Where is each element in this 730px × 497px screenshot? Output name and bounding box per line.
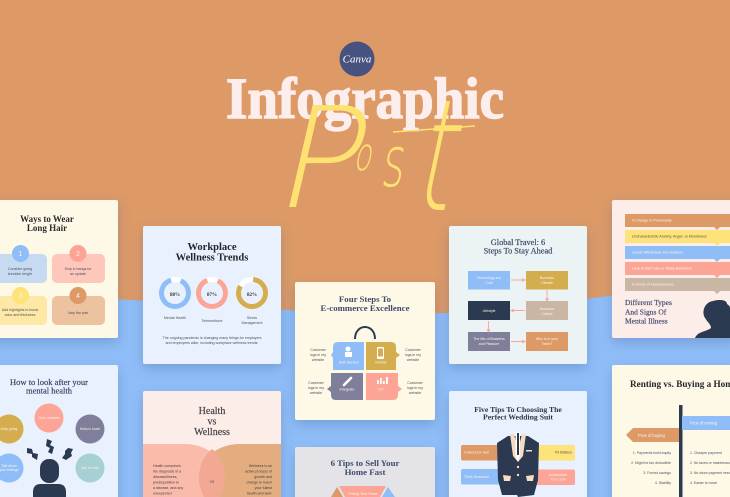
panel: 6 Tips to Sell Your Home Fast (295, 447, 435, 497)
venn shapes: growth and (254, 475, 272, 479)
sign bars: A Change In Personality (632, 218, 672, 222)
flowchart: Technology and (477, 276, 501, 280)
heading: Five Tips To Choosing The (474, 405, 562, 414)
venn shapes: a disease, and any (153, 486, 183, 490)
bag quadrants: logs in my (310, 353, 326, 357)
tip boxes: 3 (19, 293, 23, 300)
heading: Long Hair (27, 223, 67, 233)
tip boxes: 4 (76, 293, 80, 300)
tip circles: your feelings (0, 468, 19, 472)
sign bars (625, 214, 730, 294)
bag quadrants: website (407, 358, 419, 362)
bag quadrants: IoT (378, 388, 384, 392)
donut charts: 82% (247, 293, 257, 298)
heading: Wellness (194, 427, 230, 438)
venn shapes: disease/illness, (153, 475, 177, 479)
heading: How to look after your (10, 377, 88, 387)
hexagon segments: Pricing Your Home (348, 492, 378, 496)
tip boxes: Snip in bangs for (65, 267, 91, 271)
panel: How to look after your mental health (0, 365, 118, 497)
list: buying: 3. Forced savings (643, 471, 671, 475)
venn shapes: unexpected (153, 492, 172, 496)
bag quadrants: Customer (407, 381, 423, 385)
flowchart: Business (540, 307, 554, 311)
panel: Global Travel 6 Steps (449, 226, 587, 364)
heading: Different Types (625, 298, 672, 307)
donut charts: Mental Health (164, 316, 186, 320)
heading: Perfect Wedding Suit (483, 412, 553, 421)
heading: And Signs Of (625, 307, 667, 316)
bag quadrants: logs in my (308, 386, 324, 390)
bag quadrants: website (312, 358, 324, 362)
heading: vs (208, 416, 217, 428)
tip labels (461, 445, 575, 485)
venn shapes (143, 444, 281, 497)
bag quadrants: logs in my (407, 386, 423, 390)
heading: Wellness Trends (176, 252, 248, 264)
bag quadrants: Mobile (375, 360, 387, 364)
sign bars: A Sense of Hopelessness (632, 282, 674, 286)
heading: E-commerce Excellence (321, 303, 410, 313)
heading: Home Fast (345, 467, 385, 477)
list: buying: 1. Payments build equity (633, 451, 671, 455)
logo: Canva (340, 42, 374, 76)
bag quadrants: Integrate (340, 388, 354, 392)
heading: Workplace (188, 242, 236, 253)
bag quadrants (308, 342, 424, 400)
heading: mental health (26, 386, 73, 396)
icon: stressed person (27, 439, 73, 497)
tip labels: Think Seasonal (464, 475, 489, 479)
tip boxes: Consider going (8, 267, 32, 271)
flowchart (468, 271, 568, 351)
sign bars: Social Withdrawal and Isolation (632, 250, 683, 254)
panel: Five Tips To Choosing The Perfect Wedding Suit (449, 391, 587, 497)
donut charts: 87% (207, 293, 217, 298)
tip boxes: an update (70, 272, 86, 276)
title: Post script: t (404, 66, 479, 247)
title: Post script: o (350, 129, 379, 182)
venn shapes: Wellness is an (249, 464, 272, 468)
list: buying: 2. Might be tax deductible (631, 461, 671, 465)
tip circles: Talk about (1, 464, 17, 468)
flowchart: Culture (541, 312, 553, 316)
tip labels: Accessorize (549, 473, 567, 477)
bag quadrants: website (310, 391, 322, 395)
heading: Global Travel: 6 (491, 238, 545, 247)
panel: Health vs Wellness (143, 391, 281, 497)
heading: Health (199, 406, 225, 417)
tip boxes: Add highlights to boost (2, 308, 38, 312)
heading: Steps To Stay Ahead (484, 246, 553, 255)
bag handle (355, 327, 375, 339)
bag quadrants: website (409, 391, 421, 395)
tip boxes: 1 (19, 251, 23, 258)
tip boxes: 2 (76, 251, 80, 258)
flowchart: Team? (542, 342, 552, 346)
tip boxes: shoulder length (8, 272, 32, 276)
panel: Renting vs. Buying a Home (612, 365, 730, 497)
flowchart: Lifestyle (483, 309, 495, 313)
title: Infographic: Infographic (226, 66, 504, 131)
venn shapes: health and well- (247, 492, 273, 496)
heading: 6 Tips to Sell Your (331, 458, 399, 468)
venn shapes: Health comprises (153, 464, 181, 468)
flowchart: Cost (485, 281, 493, 285)
donut charts: Stress (247, 316, 257, 320)
heading: Four Steps To (339, 294, 391, 304)
donut charts: Telemedicine (202, 319, 222, 323)
bag quadrants: Customer (405, 348, 421, 352)
bag quadrants: Customer (308, 381, 324, 385)
panel: Ways to Wear Long Hair (0, 200, 118, 338)
paragraph: The ongoing pandemic is changing many things for employers (163, 336, 261, 340)
center bar (679, 405, 682, 497)
tip circles: Keep in touch (80, 427, 100, 431)
icon: silhouette (695, 300, 730, 338)
bag quadrants: Self Service (339, 360, 359, 364)
sign bars: Lack of Self Care or Risky Behaviors (632, 266, 692, 270)
venn shapes: predisposition to (153, 480, 179, 484)
tip circles: Keep going (1, 427, 18, 431)
list: renting: 4. Easier to move (690, 481, 717, 485)
flag: pros of renting: Pros of renting (690, 420, 718, 426)
paragraph: and employees alike, including workplace wellness trends. (166, 341, 258, 345)
background: blue wave (0, 280, 730, 497)
heading: Ways to Wear (20, 214, 74, 224)
panel: Four Steps To E-commerce Excellence (295, 282, 435, 420)
list: buying: 4. Stability (655, 481, 671, 485)
flowchart: Who is in your (536, 337, 558, 341)
flowchart: Climate (541, 281, 553, 285)
bag quadrants: Customer (310, 348, 326, 352)
tip labels: Colours for Suit (464, 450, 489, 454)
tip boxes: Vary the part (68, 311, 88, 315)
tip labels: Fit Matters (555, 450, 572, 454)
panel: Different Types And Signs Of Mental Illness (612, 200, 730, 338)
list: renting: 1. Cheaper payment (690, 451, 722, 455)
venn shapes: VS (210, 480, 215, 484)
venn shapes: change to reach (246, 480, 272, 484)
donut charts: Management (242, 321, 262, 325)
flag: pros of buying (626, 428, 679, 442)
tip boxes (0, 245, 105, 325)
tip circles (0, 404, 104, 482)
title: Post script (264, 66, 479, 247)
venn shapes: active process of (245, 470, 272, 474)
venn shapes: your fullest (255, 486, 272, 490)
logo: Canva: Canva (343, 54, 372, 66)
title: Post script: P (264, 78, 386, 241)
flag: pros of renting (682, 416, 730, 430)
sign bars: Uncharacteristic Anxiety, Anger, or Moodiness (632, 234, 707, 238)
tip circles: Go to sessions (38, 416, 60, 420)
donut charts (157, 275, 267, 325)
donut charts: 88% (170, 293, 180, 298)
flowchart: The Mix of Business (473, 337, 505, 341)
heading: Mental Illness (625, 317, 668, 326)
panel: Workplace Wellness Trends (143, 226, 281, 364)
tip boxes: color and thickness (5, 313, 36, 317)
icon: suit jacket (497, 432, 539, 497)
flowchart: Business (540, 276, 554, 280)
bag quadrants: logs in my (405, 353, 421, 357)
flag: pros of buying: Pros of buying (638, 433, 665, 438)
venn shapes: the diagnosis of a (153, 470, 181, 474)
flowchart: and Pleasure (479, 342, 499, 346)
title: Post script: s (378, 122, 412, 203)
tip labels: Your Look (550, 478, 566, 482)
tip circles: Ask for help (81, 466, 99, 470)
